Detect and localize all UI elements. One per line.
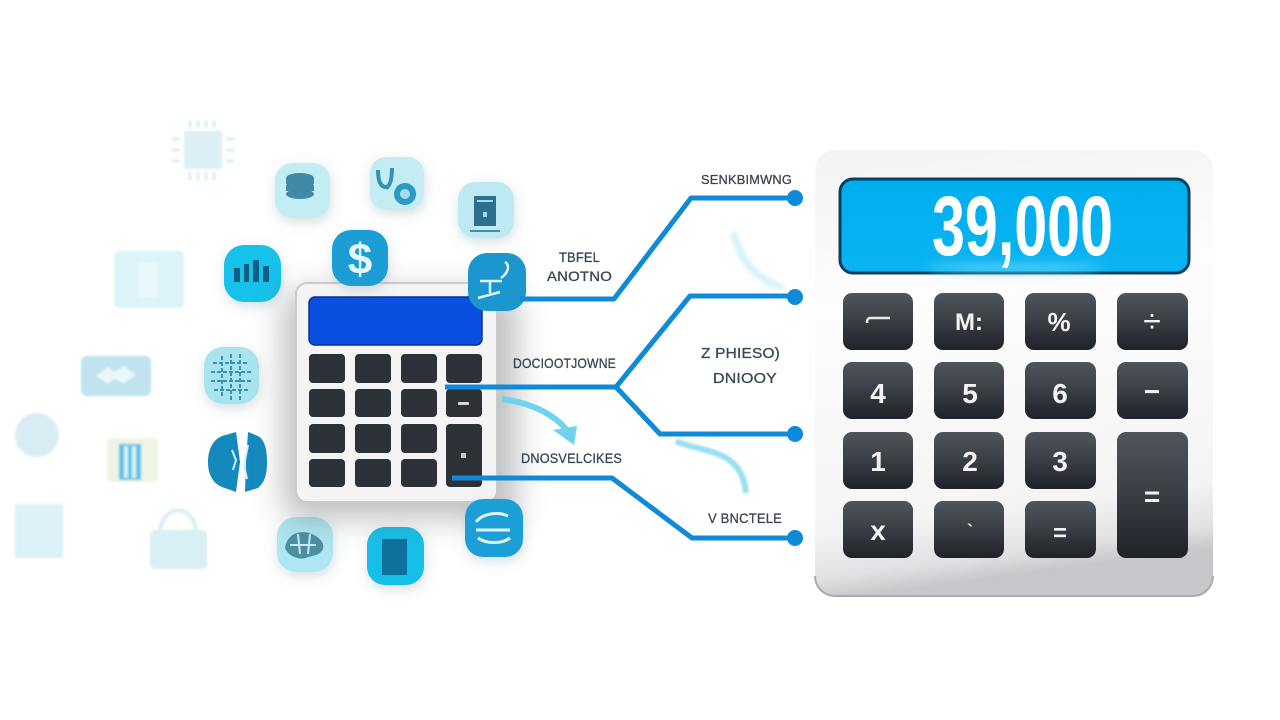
label: upper left two lines: TBFEL [559, 249, 600, 265]
large calculator [815, 150, 1213, 596]
label: lower left: DNOSVELCIKES [521, 450, 622, 466]
connector lines [445, 198, 795, 538]
arrow: light blue down to the right [502, 399, 577, 445]
connector: third line [616, 387, 795, 434]
icon: document [458, 182, 514, 238]
label: upper left two lines: ANOTNO [547, 268, 612, 284]
label: middle right two lines [701, 345, 780, 387]
curved flow arrows [502, 232, 783, 493]
icon: cloud card [81, 356, 151, 396]
small calculator [284, 283, 516, 518]
icon: database [275, 163, 330, 218]
keypad [843, 293, 1188, 558]
small calculator keys [309, 354, 482, 487]
keypad: 2 [962, 446, 978, 477]
icon: pale bag [150, 510, 207, 569]
arrow: pale upper wisp [733, 232, 783, 288]
keypad: 4 [870, 378, 886, 409]
label: top: SENKBIMWNG [701, 172, 792, 187]
keypad: 6 [1052, 378, 1068, 409]
icon: currency coins [370, 157, 424, 210]
icon: dollar sign: $ [348, 235, 372, 284]
label: upper left two lines [547, 249, 612, 284]
icon: ghost gear [15, 413, 59, 457]
icon: wave tile [465, 499, 523, 557]
keypad: x [870, 515, 886, 546]
icon: microchip [172, 120, 234, 180]
keypad: 5 [962, 378, 978, 409]
icon cluster: faded technology and finance icons [15, 120, 514, 585]
arrow: lower wisp [676, 441, 746, 493]
icon: server stripes [107, 438, 158, 482]
connector: second line [445, 296, 795, 387]
keypad: % [1047, 307, 1071, 337]
connector: top line [520, 198, 795, 299]
keypad: 3 [1052, 446, 1068, 477]
connector labels [513, 172, 792, 526]
keypad: M: [955, 309, 983, 336]
label: middle left: DOCIOOTJOWNE [513, 355, 616, 371]
icon: cyan data tile [224, 245, 281, 302]
large calculator body [815, 150, 1213, 596]
icon: split blue shield [208, 432, 267, 492]
icon: pale tablet [15, 504, 63, 558]
small calculator screen [309, 297, 482, 345]
label: middle right two lines: DNIOOY [713, 370, 777, 387]
connector: bottom line [452, 478, 795, 538]
keypad: = [1144, 481, 1160, 512]
icon: brain network [277, 517, 333, 572]
label: middle right two lines: Z PHIESO) [701, 345, 780, 362]
keypad: ` [967, 521, 973, 541]
icon: circuit tile [468, 253, 526, 311]
keypad: − [1144, 376, 1160, 407]
large calculator display: 39,000 [932, 179, 1113, 273]
keypad: = [1053, 520, 1067, 547]
icon: cyan battery [367, 527, 424, 585]
connector end dots [787, 190, 803, 546]
label: bottom right: V BNCTELE [708, 510, 782, 526]
keypad: 1 [870, 446, 886, 477]
keypad: ÷ [1143, 303, 1161, 339]
icon: globe grid [204, 347, 259, 404]
icon: dollar sign [332, 230, 388, 286]
icon: pale circuit board [114, 251, 184, 308]
